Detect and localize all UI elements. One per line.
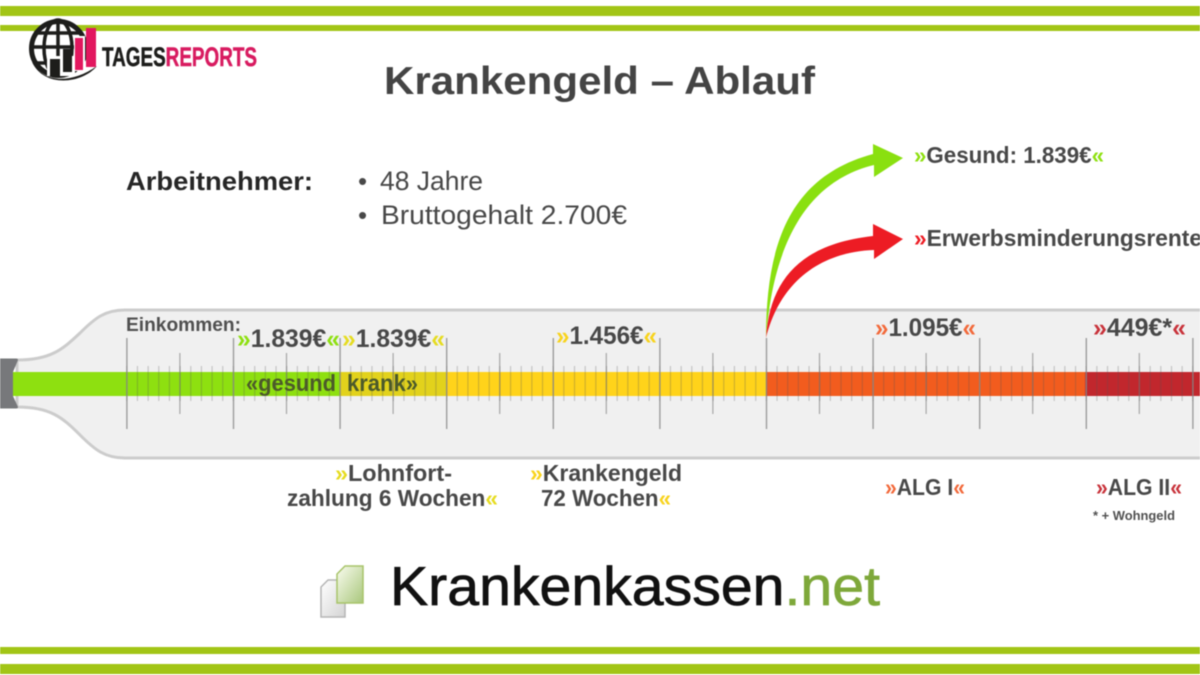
label: Einkommen: Einkommen:: [126, 315, 241, 336]
phase label: Lohnfortzahlung: zahlung 6 Wochen«: [287, 485, 498, 511]
thermometer body: [17, 310, 1200, 458]
thermometer timeline: [0, 310, 1200, 458]
phase label: ALG II: »ALG II«: [1096, 474, 1182, 500]
footnote: Wohngeld: * + Wohngeld: [1093, 508, 1175, 523]
phase label: Krankengeld: [530, 460, 682, 511]
value: ALG I: »1.095€«: [875, 314, 976, 342]
arrow: red to Erwerbsminderungsrente: [766, 224, 903, 338]
text: age: 48 Jahre: [380, 166, 483, 196]
employee details: [126, 166, 627, 230]
phase label: Lohnfortzahlung: »Lohnfort-: [335, 460, 452, 486]
bottom green stripes: [0, 647, 1200, 674]
income bar: [13, 372, 1200, 396]
bar label: gesund krank: krank»: [347, 370, 418, 396]
bullet: salary: •: [358, 200, 367, 230]
outcome label: Erwerbsminderungsrente: »Erwerbsminderungsrente: [914, 225, 1200, 251]
phase label: Krankengeld: 72 Wochen«: [541, 485, 671, 511]
logo: Krankenkassen.net: [321, 555, 880, 617]
arrow: green to Gesund: [766, 144, 903, 338]
scale ticks: [126, 366, 1200, 401]
logo: Tagesreports: [31, 20, 257, 80]
top green stripes: [0, 6, 1200, 31]
outcome label: Gesund: »Gesund: 1.839€«: [914, 142, 1104, 168]
icon: globe with bars: [31, 20, 97, 80]
text: salary: Bruttogehalt 2.700€: [381, 200, 627, 230]
value: sick pay continuation: »1.839€«: [342, 325, 445, 353]
phase label: ALG I: »ALG I«: [885, 474, 965, 500]
wordmark: Krankenkassen .net: [390, 555, 880, 617]
thermometer cap: [0, 358, 18, 408]
value: healthy income: »1.839€«: [237, 325, 340, 353]
label: Arbeitnehmer: Arbeitnehmer:: [126, 166, 313, 196]
bar label: gesund krank: [246, 370, 418, 396]
wordmark: TAGESREPORTS: [102, 42, 257, 72]
phase label: Krankengeld: »Krankengeld: [530, 460, 682, 486]
title: Krankengeld – Ablauf: [384, 60, 816, 103]
bullet: age: •: [358, 166, 367, 196]
value: ALG II: »449€*«: [1093, 314, 1186, 342]
bar label: gesund krank: «gesund: [246, 370, 336, 396]
icon: documents: [321, 566, 363, 617]
value: Krankengeld: »1.456€«: [556, 322, 657, 350]
phase label: Lohnfortzahlung: [287, 460, 498, 511]
